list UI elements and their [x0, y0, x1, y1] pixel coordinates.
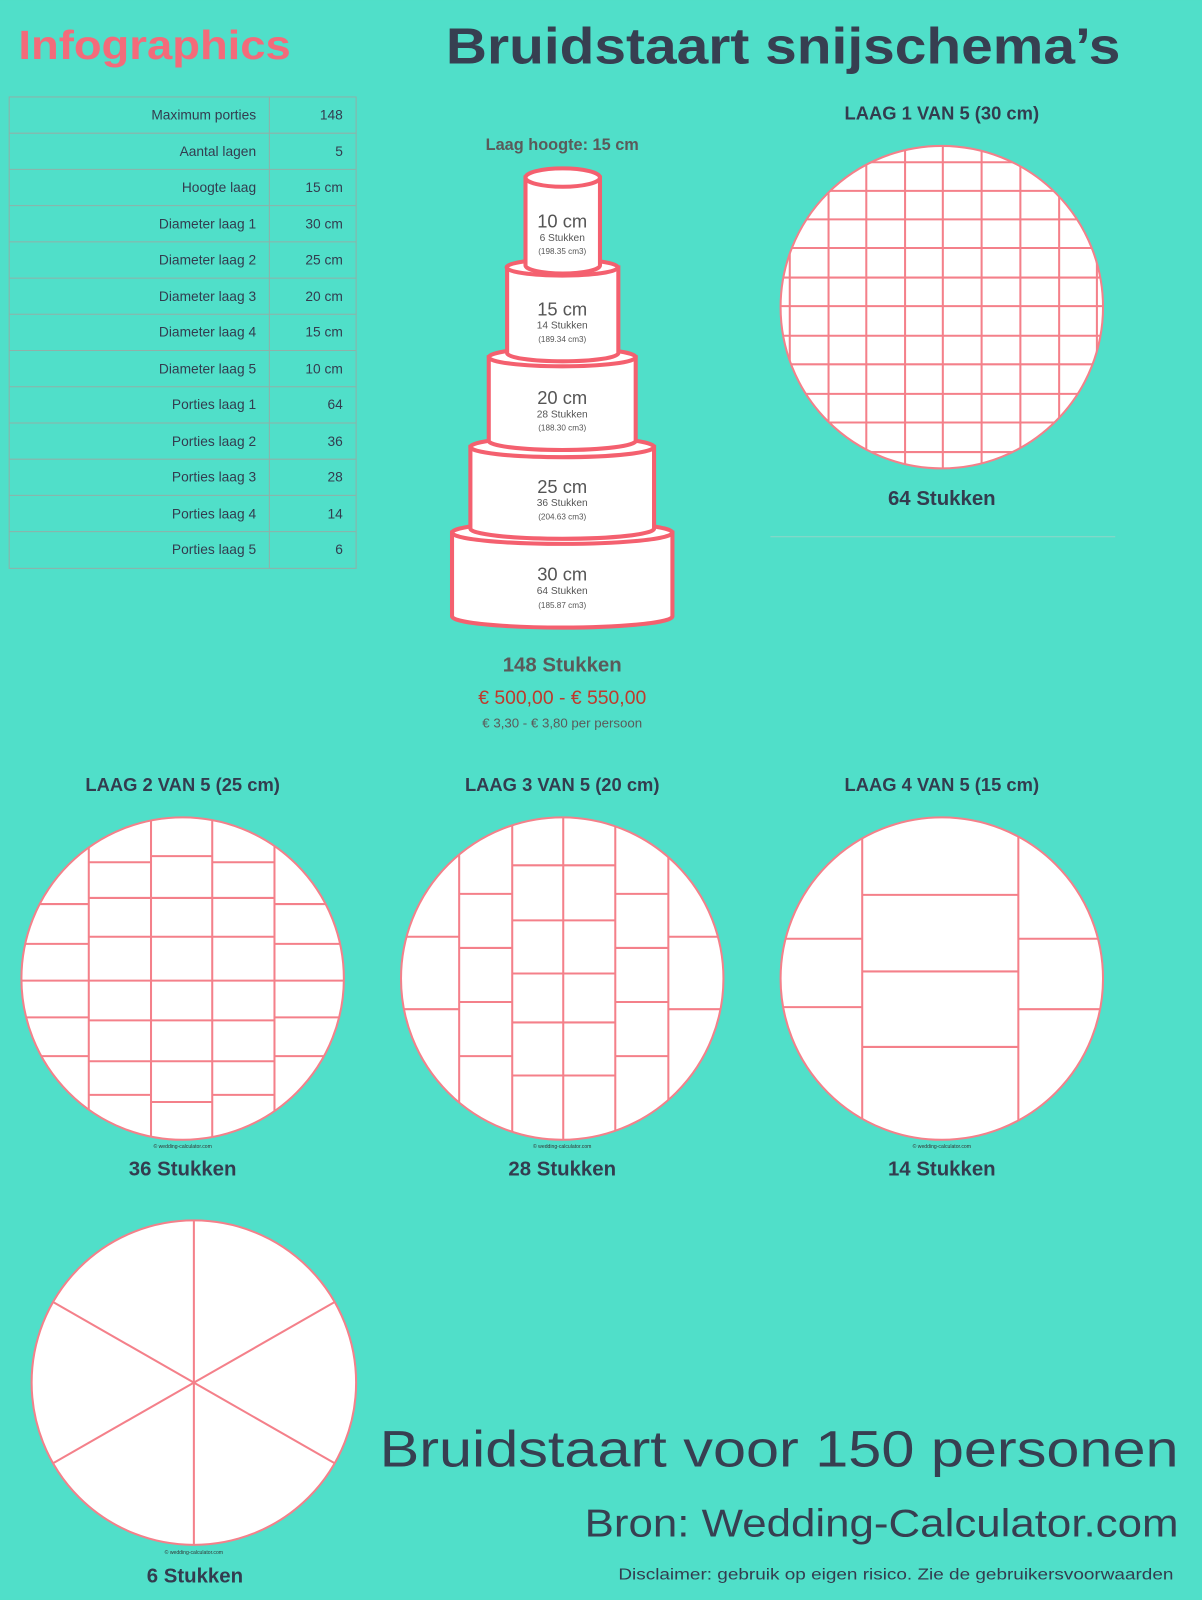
panel: layer 2 — [20, 778, 345, 1176]
data table: 15 cm — [305, 325, 343, 340]
cake illustration: Laag hoogte: 15 cm — [486, 136, 639, 154]
data table: Diameter laag 1 — [159, 217, 256, 232]
data table: Maximum porties — [151, 107, 256, 122]
panel: layer 3: 28 Stukken — [508, 1158, 616, 1180]
panel: layer 3: LAAG 3 VAN 5 (20 cm) — [465, 774, 659, 795]
panel: layer 1: 64 Stukken — [888, 488, 996, 510]
data table: 36 — [328, 434, 343, 449]
data table: Porties laag 4 — [172, 506, 256, 521]
panel: layer 1 — [780, 106, 1104, 505]
panel: layer 3: © wedding-calculator.com — [533, 1143, 591, 1150]
cake illustration: 30 cm — [537, 564, 587, 585]
cake illustration: (185.87 cm3) — [538, 601, 587, 610]
source: Bron: Wedding-Calculator.com — [585, 1503, 1179, 1546]
panel: layer 4: 14 Stukken — [888, 1158, 996, 1180]
brand label: Infographics — [18, 22, 291, 68]
data table: 20 cm — [305, 289, 343, 304]
cake illustration: 10 cm — [537, 211, 587, 232]
cake totals: € 3,30 - € 3,80 per persoon — [482, 716, 642, 731]
data table: Diameter laag 2 — [159, 252, 256, 267]
data table: Porties laag 2 — [172, 434, 256, 449]
panel: layer 5 — [32, 1220, 356, 1588]
cake illustration: 64 Stukken — [537, 586, 588, 597]
data table: 64 — [328, 397, 343, 412]
data table: Porties laag 5 — [172, 542, 256, 557]
panel: layer 5: 6 Stukken — [147, 1566, 243, 1588]
data table: Porties laag 3 — [172, 470, 256, 485]
disclaimer: Disclaimer: gebruik op eigen risico. Zie de gebruikersvoorwaarden — [618, 1567, 1173, 1584]
data table: 30 cm — [305, 217, 343, 232]
data table: 25 cm — [305, 252, 343, 267]
panel: layer 4: © wedding-calculator.com — [913, 1143, 971, 1150]
data table: 14 — [328, 506, 343, 521]
title: Bruidstaart snijschema’s — [446, 17, 1120, 74]
panel: layer 3 — [388, 774, 735, 1180]
panel: layer 2: LAAG 2 VAN 5 (25 cm) — [85, 774, 280, 795]
data table: Diameter laag 4 — [159, 325, 256, 340]
data table: Porties laag 1 — [172, 397, 256, 412]
cake totals: 148 Stukken — [503, 654, 622, 676]
cake illustration: 14 Stukken — [537, 321, 588, 332]
panel: layer 2: 36 Stukken — [129, 1158, 236, 1180]
data table: 5 — [335, 144, 343, 159]
cake illustration — [452, 136, 672, 628]
data table: Diameter laag 5 — [159, 361, 256, 376]
cake illustration: 36 Stukken — [537, 498, 588, 509]
panel: layer 1: LAAG 1 VAN 5 (30 cm) — [845, 102, 1039, 123]
cake illustration: 28 Stukken — [537, 409, 588, 420]
cake illustration: 25 cm — [537, 476, 587, 497]
data table: 148 — [320, 107, 343, 122]
data table — [9, 97, 356, 568]
cake illustration: (204.63 cm3) — [538, 512, 587, 521]
cake illustration: (189.34 cm3) — [538, 335, 587, 344]
data table: 6 — [335, 542, 343, 557]
footer headline: Bruidstaart voor 150 personen — [380, 1420, 1179, 1477]
cake totals: € 500,00 - € 550,00 — [478, 687, 646, 709]
panel: layer 4 — [780, 778, 1104, 1176]
data table: Aantal lagen — [180, 144, 256, 159]
cake illustration: 6 Stukken — [540, 233, 585, 244]
data table: 28 — [328, 470, 343, 485]
cake illustration: (188.30 cm3) — [538, 424, 587, 433]
cake totals — [478, 654, 646, 731]
data table: Hoogte laag — [182, 180, 256, 195]
data table: Diameter laag 3 — [159, 289, 256, 304]
panel: layer 5: © wedding-calculator.com — [165, 1549, 223, 1556]
cake illustration: 20 cm — [537, 387, 587, 408]
panel: layer 2: © wedding-calculator.com — [153, 1143, 212, 1150]
cake illustration: (198.35 cm3) — [538, 247, 587, 256]
data table: 15 cm — [305, 180, 343, 195]
data table: 10 cm — [305, 361, 343, 376]
panel: layer 4: LAAG 4 VAN 5 (15 cm) — [845, 774, 1039, 795]
cake illustration: 15 cm — [537, 298, 587, 319]
